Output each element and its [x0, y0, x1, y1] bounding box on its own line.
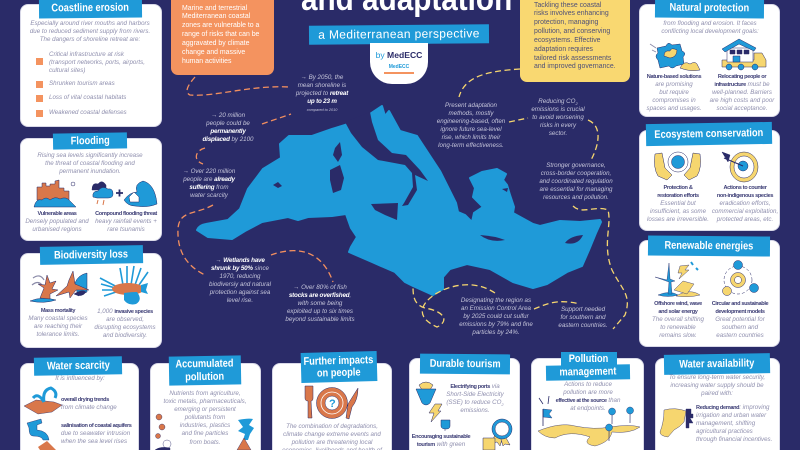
- map callout: fish stocks: [285, 284, 355, 323]
- map callout: stronger governance: [539, 162, 613, 201]
- text: relocating: [710, 74, 774, 112]
- text: sustainable tourism: Encouraging sustainable: [412, 434, 470, 440]
- text: non-indigenous species: eradication efforts,: [720, 200, 770, 207]
- text: water availability intro: increasing water supply should be: [670, 382, 764, 389]
- intro box: risks: [171, 0, 274, 75]
- map callout: stronger governance: Stronger governance,: [546, 162, 606, 169]
- text: accumulated pollution: pollutants from: [185, 414, 225, 421]
- intro box: solutions: tailored risk assessments: [534, 55, 611, 62]
- orange dashed connectors: [178, 77, 333, 282]
- heading: pollution management: [546, 352, 630, 381]
- icon: flooded city: [34, 180, 76, 207]
- map callout: shoreline retreat: projected to retreat: [296, 90, 348, 97]
- map callout: shoreline retreat: mean shoreline is: [298, 82, 346, 89]
- text: sustainable tourism: tourism with green: [417, 441, 465, 448]
- map callout: fish stocks: exploited up to six times: [287, 308, 353, 315]
- heading: renewable energies: [648, 235, 770, 257]
- panel: flooding: [20, 138, 162, 241]
- map callout: stronger governance: and coordinated regulation: [539, 178, 613, 185]
- text: pollution management: [556, 381, 620, 412]
- text: salinisation: salinisation of coastal aquifers: [61, 423, 132, 429]
- map callout: support: eastern countries.: [558, 322, 608, 329]
- text: natural protection intro: conflicting local development goals:: [661, 28, 759, 35]
- text: reducing demand: Reducing demand: improving: [696, 404, 770, 411]
- icon: tap and hand: [27, 419, 56, 450]
- text: compound flooding: heavy rainfall events +: [95, 218, 157, 225]
- text: electrifying ports: emissions.: [460, 407, 490, 414]
- intro box: solutions: and improved governance.: [534, 63, 616, 70]
- heading: water availability: Water availability: [679, 357, 755, 370]
- icon: dry land and fountain: [24, 388, 62, 414]
- text: salinisation: due to seawater intrusion: [61, 430, 130, 437]
- icon: fork, plate and knife: [305, 386, 358, 419]
- text: salinisation: [61, 423, 132, 445]
- text: natural protection intro: from flooding and erosion. It faces: [663, 20, 757, 27]
- text: invasive species: and biodiversity.: [103, 332, 147, 339]
- heading: pollution management: Pollution: [569, 353, 609, 365]
- text: reducing demand: irrigation and urban water: [696, 412, 766, 419]
- text: relocating: Relocating people or: [718, 74, 766, 80]
- icon: green certification badge: [483, 419, 512, 450]
- bullet list: shoreline dangers: Weakened coastal defenses: [49, 109, 127, 116]
- heading: durable tourism: Durable tourism: [430, 357, 500, 370]
- heading: ecosystem conservation: [646, 122, 772, 146]
- text: compound flooding: Compound flooding threat: [95, 211, 157, 217]
- bullet list: shoreline dangers: Critical infrastructure at risk: [49, 51, 124, 58]
- map callout: wetlands: → Wetlands have: [215, 257, 265, 264]
- text: non-indigenous species: non-indigenous species: [717, 193, 773, 199]
- map callout: displaced people: people could be: [206, 120, 250, 127]
- map callout: wetlands: biodiversiy and natural: [209, 281, 271, 288]
- text: electrifying ports: [446, 383, 504, 414]
- text: circular models: [712, 301, 768, 339]
- map callout: present adaptation: Present adaptation: [445, 102, 497, 109]
- icon: wind turbine and solar panels: [655, 262, 700, 297]
- map callout: present adaptation: [437, 102, 505, 149]
- icon: house on truck: [722, 39, 766, 70]
- map callout: water scarcity: → Over 220 million: [183, 168, 235, 175]
- map callout: emission control area: by 2025 could cut sulfur: [463, 313, 529, 320]
- heading: water availability: [664, 353, 770, 375]
- intro box: solutions: protection, managing: [534, 19, 598, 26]
- text: coastline intro: due to reduced sediment supply from rivers.: [30, 28, 150, 35]
- text: mass mortality: tolerance limits.: [36, 331, 79, 338]
- text: protection efforts: Essential but: [660, 200, 696, 207]
- text: nature-based solutions: Nature-based solutions: [647, 74, 701, 80]
- text: circular models: southern and: [722, 324, 758, 331]
- bullet list: shoreline dangers: [36, 51, 145, 117]
- map callout: fish stocks: with some being: [298, 300, 342, 307]
- text: accumulated pollution: emerging or persistent: [174, 406, 236, 413]
- text: electrifying ports: Electrifying ports via: [450, 383, 500, 390]
- intro box: solutions: pollution, and conserving: [534, 28, 610, 35]
- text: reducing demand: [696, 404, 772, 443]
- map callout: water scarcity: water scarcity: [190, 192, 228, 199]
- text: relocating: well-planned. Barriers: [712, 89, 772, 96]
- bullet list: shoreline dangers: (transport networks, ports, airports,: [49, 59, 145, 66]
- map callout: displaced people: [202, 112, 254, 143]
- map callout: present adaptation: engineering-based, often: [437, 118, 505, 125]
- text: reducing demand: agricultural practices: [696, 428, 753, 435]
- subtitle tag: a Mediterranean perspective: [318, 26, 480, 42]
- heading: pollution management: management: [559, 366, 617, 379]
- text: flooding intro: [37, 152, 143, 175]
- text: accumulated pollution: Nutrients from agriculture,: [169, 390, 241, 397]
- text: accumulated pollution: toxic metals, pharmaceuticals,: [164, 398, 246, 405]
- text: offshore energy: and solar energy: [658, 309, 698, 315]
- map callout: present adaptation: long-term effectiveness.: [438, 142, 504, 149]
- text: circular models: development models: [715, 309, 765, 315]
- text: further impacts: [282, 423, 382, 450]
- text: further impacts: The combination of degradations,: [286, 423, 378, 430]
- intro box: solutions: adaptation requires: [534, 46, 593, 53]
- text: further impacts: climate change extreme events and: [283, 431, 381, 438]
- text: water availability intro: paired with:: [701, 390, 733, 397]
- MedECC logo badge: MedECC: [389, 64, 409, 70]
- panel: water availability: [655, 358, 780, 450]
- text: offshore energy: Offshore wind, wave: [654, 301, 702, 307]
- text: relocating: social acceptance.: [717, 105, 767, 112]
- intro box: risks: Mediterranean coastal: [182, 13, 250, 20]
- icon: puzzle piece and leaves: [650, 43, 700, 71]
- text: mass mortality: Mass mortality: [41, 308, 75, 314]
- map callout: displaced people: permanently: [210, 128, 246, 135]
- map callout: present adaptation: ignore future sea-level: [440, 126, 502, 133]
- text: pollution management: at endpoints.: [570, 405, 606, 412]
- map callout: water scarcity: suffering from: [189, 184, 229, 191]
- text: water availability intro: [669, 374, 765, 397]
- text: accumulated pollution: from boats.: [190, 439, 220, 446]
- text: drying trends: from climate change: [61, 404, 117, 411]
- text: salinisation: when the sea level rises: [61, 438, 127, 445]
- panel: coastline erosion: [20, 4, 162, 127]
- text: offshore energy: [652, 301, 704, 339]
- map callout: wetlands: shrunk by 50% since: [211, 265, 269, 272]
- icon: hand squeezing tap: [660, 409, 693, 437]
- text: compound flooding: [95, 211, 158, 233]
- map callout: shoreline retreat: up to 23 m: [307, 98, 337, 105]
- heading: coastline erosion: [39, 0, 142, 18]
- MedECC logo badge: [370, 43, 428, 84]
- map callout: emission control area: an Emission Control Area: [461, 305, 531, 312]
- icon: microplastics: [155, 414, 171, 450]
- text: non-indigenous species: protected areas, etc.: [717, 216, 773, 223]
- map callout: support: [558, 306, 608, 329]
- map callout: support: Support needed: [561, 306, 605, 313]
- map callout: wetlands: protection against sea: [210, 289, 270, 296]
- map callout: shoreline retreat: compared to 2010: [307, 108, 337, 112]
- text: flooding intro: Rising sea levels significantly increase: [37, 152, 143, 159]
- text: flooding intro: permanent inundation.: [59, 168, 121, 175]
- intro box: solutions: Tackling these coastal: [534, 2, 601, 8]
- map callout: fish stocks: stocks are overfished,: [289, 292, 351, 299]
- panel: renewable energies: [639, 240, 780, 347]
- text: coastline intro: The dangers of shoreline retreat are:: [40, 36, 140, 43]
- text: vulnerable areas: Densely populated and: [25, 218, 89, 225]
- map callout: shoreline retreat: → By 2050, the: [301, 74, 343, 81]
- yellow dashed connectors: [413, 69, 627, 329]
- map callout: reducing emissions: to avoid worsening: [532, 114, 584, 121]
- text: mass mortality: are reaching their: [34, 323, 82, 330]
- heading: biodiversity loss: [40, 245, 143, 265]
- text: non-indigenous species: commercial exploitation,: [712, 208, 778, 215]
- map callout: reducing emissions: emissions is crucial: [531, 106, 585, 113]
- heading: accumulated pollution: pollution: [185, 370, 225, 383]
- heading: biodiversity loss: Biodiversity loss: [54, 248, 129, 261]
- text: accumulated pollution: and fine particles: [182, 430, 228, 437]
- text: nature-based solutions: [646, 74, 702, 112]
- text: invasive species: 1,000 invasive species: [97, 308, 153, 315]
- text: flooding intro: the threat of coastal flooding and: [45, 160, 135, 167]
- panel: water scarcity: [20, 363, 139, 450]
- text: non-indigenous species: [712, 185, 778, 223]
- icon: question mark on plate: ?: [329, 398, 336, 410]
- subtitle tag: [309, 24, 489, 45]
- text: offshore energy: remains slow.: [659, 332, 697, 339]
- text: pollution management: effective at the source than: [556, 397, 620, 404]
- heading: ecosystem conservation: Ecosystem conservation: [654, 127, 764, 141]
- map callout: water scarcity: people are already: [183, 176, 235, 183]
- heading: accumulated pollution: Accumulated: [176, 357, 234, 371]
- map callout: emission control area: Designating the region as: [461, 297, 531, 304]
- heading: natural protection: [655, 0, 764, 18]
- heading: further impacts: on people: [317, 366, 361, 380]
- icon: smoke and warning: [237, 419, 254, 450]
- text: protection efforts: [647, 185, 709, 223]
- map callout: reducing emissions: sector.: [549, 130, 567, 137]
- icon: target and arrow: [722, 152, 758, 182]
- map callout: stronger governance: cross-border cooperation,: [541, 170, 611, 177]
- panel: pollution management: [531, 358, 644, 450]
- bullet list: shoreline dangers: Loss of vital coastal habitats: [49, 94, 126, 101]
- map callout: fish stocks: → Over 80% of fish: [293, 284, 347, 291]
- text: relocating: are high costs and poor: [710, 97, 774, 104]
- map callout: reducing emissions: [531, 98, 585, 137]
- intro box: risks: change and massive: [182, 49, 245, 56]
- intro box: risks: aggravated by climate: [182, 40, 249, 47]
- text: sustainable tourism: [412, 434, 470, 448]
- heading: coastline erosion: Coastline erosion: [52, 2, 129, 15]
- intro box: solutions: risks involves enhancing: [534, 10, 609, 17]
- panel: durable tourism: [409, 358, 520, 450]
- text: nature-based solutions: are promising: [655, 81, 693, 88]
- text: reducing demand: through financial incentives.: [696, 436, 772, 443]
- text: compound flooding: rare tsunamis: [107, 226, 145, 233]
- heading: water scarcity: Water scarcity: [46, 359, 110, 372]
- map callout: stronger governance: are essential for managing: [540, 186, 612, 193]
- text: mass mortality: [28, 308, 88, 338]
- icon: electric ship and plug: [416, 382, 450, 431]
- text: nature-based solutions: spaces and usages.: [646, 105, 702, 112]
- text: circular models: Circular and sustainable: [712, 301, 768, 307]
- text: electrifying ports: (SSE) to reduce CO2: [446, 399, 504, 407]
- map: Mediterranean sea: [197, 106, 601, 295]
- heading: further impacts: Further impacts: [304, 354, 374, 367]
- panel: ecosystem conservation: [639, 130, 780, 231]
- text: accumulated pollution: industries, plastics: [180, 422, 230, 429]
- heading: flooding: Flooding: [70, 134, 110, 147]
- heading: natural protection: Natural protection: [670, 2, 749, 15]
- text: non-indigenous species: Actions to counter: [723, 185, 767, 191]
- map callout: displaced people: → 20 million: [211, 112, 245, 119]
- text: coastline intro: [30, 20, 150, 43]
- bullet list: shoreline dangers: cultural sites): [49, 67, 85, 74]
- text: coastline intro: Especially around river mouths and harbors: [30, 20, 150, 27]
- text: circular models: Great potential for: [715, 316, 765, 323]
- heading: further impacts: [301, 351, 377, 383]
- text: invasive species: are observed,: [106, 316, 144, 323]
- text: accumulated pollution: [164, 390, 246, 446]
- map callout: emission control area: [459, 297, 533, 336]
- panel: further impacts on people: [272, 363, 392, 450]
- text: protection efforts: losses are irreversible.: [647, 216, 709, 223]
- intro box: solutions: ecosystems. Effective: [534, 37, 601, 44]
- map callout: wetlands: [209, 257, 272, 304]
- map callout: fish stocks: beyond sustainable limits: [285, 316, 355, 323]
- map callout: water scarcity: [183, 168, 236, 199]
- map callout: emission control area: particles by 24%.: [472, 329, 520, 336]
- text: nature-based solutions: but require: [659, 89, 689, 96]
- intro box: risks: human activities: [182, 58, 231, 65]
- map callout: support: for southern and: [560, 314, 606, 321]
- text: further impacts: pollution are threatening local: [292, 439, 372, 446]
- panel: accumulated pollution: [150, 363, 261, 450]
- map callout: present adaptation: methods, mostly: [448, 110, 494, 117]
- text: pollution management: Actions to reduce: [564, 381, 612, 388]
- map callout: emission control area: emissions by 79% and fine: [459, 321, 533, 328]
- text: protection efforts: restoration efforts: [657, 193, 699, 199]
- icon: circular economy gear: [722, 260, 758, 296]
- map callout: wetlands: level rise.: [227, 297, 253, 304]
- map callout: reducing emissions: Reducing CO2: [538, 98, 578, 106]
- text: protection efforts: insufficient, as some: [650, 208, 706, 215]
- heading: flooding: [53, 132, 127, 150]
- panel: natural protection: [639, 4, 780, 117]
- bullet list: shoreline dangers: Shrunken tourism areas: [49, 80, 115, 87]
- map callout: shoreline retreat: [296, 74, 349, 112]
- map callout: present adaptation: rise, which limits their: [442, 134, 500, 141]
- heading: water scarcity: [34, 356, 122, 376]
- intro box: solutions: [520, 0, 630, 82]
- icon: storm cloud and wave: [92, 181, 157, 207]
- text: water availability intro: To ensure long-term water security,: [669, 374, 765, 381]
- icon: lionfish: [100, 266, 148, 304]
- map callout: stronger governance: resources and pollution.: [543, 194, 609, 201]
- text: relocating: infrastructure must be: [714, 81, 770, 88]
- text: offshore energy: The overall shifting: [652, 316, 704, 323]
- map callout: reducing emissions: risks in every: [540, 122, 576, 129]
- text: pollution management: pollution are more: [563, 389, 613, 396]
- text: nature-based solutions: compromises in: [652, 97, 696, 104]
- text: invasive species: disrupting ecosystems: [94, 324, 156, 331]
- text: electrifying ports: Short-Side Electricity: [446, 391, 504, 398]
- text: vulnerable areas: Vulnerable areas: [38, 211, 76, 217]
- text: protection efforts: Protection &: [663, 185, 693, 191]
- MedECC logo badge: by MedECC: [376, 50, 422, 60]
- text: circular models: eastern countries: [716, 332, 764, 339]
- icon: hands around globe: [654, 152, 701, 180]
- intro box: risks: range of risks that can be: [182, 31, 259, 38]
- heading: renewable energies: Renewable energies: [665, 239, 753, 252]
- text: offshore energy: to renewable: [660, 324, 696, 331]
- text: vulnerable areas: urbanised regions: [32, 226, 82, 233]
- intro box: risks: zones are vulnerable to a: [182, 22, 259, 29]
- text: vulnerable areas: [25, 211, 89, 233]
- intro box: risks: Marine and terrestrial: [182, 4, 247, 12]
- text: drying trends: overall drying trends: [61, 397, 109, 403]
- panel: biodiversity loss: [20, 253, 162, 348]
- icon: coral and starfish: [30, 271, 89, 302]
- icon: pollution source flag and spill: [538, 396, 640, 446]
- heading: accumulated pollution: [169, 355, 241, 386]
- text: invasive species: [94, 308, 156, 339]
- text: mass mortality: Many coastal species: [28, 315, 88, 322]
- map callout: displaced people: displaced by 2100: [202, 136, 254, 143]
- text: water scarcity intro: It is influenced by:: [55, 375, 105, 382]
- heading: durable tourism: [420, 354, 510, 374]
- text: natural protection intro: [661, 20, 759, 35]
- text: reducing demand: management, shifting: [696, 420, 755, 427]
- text: drying trends: [61, 397, 117, 411]
- map callout: wetlands: 1970, reducing: [220, 273, 260, 280]
